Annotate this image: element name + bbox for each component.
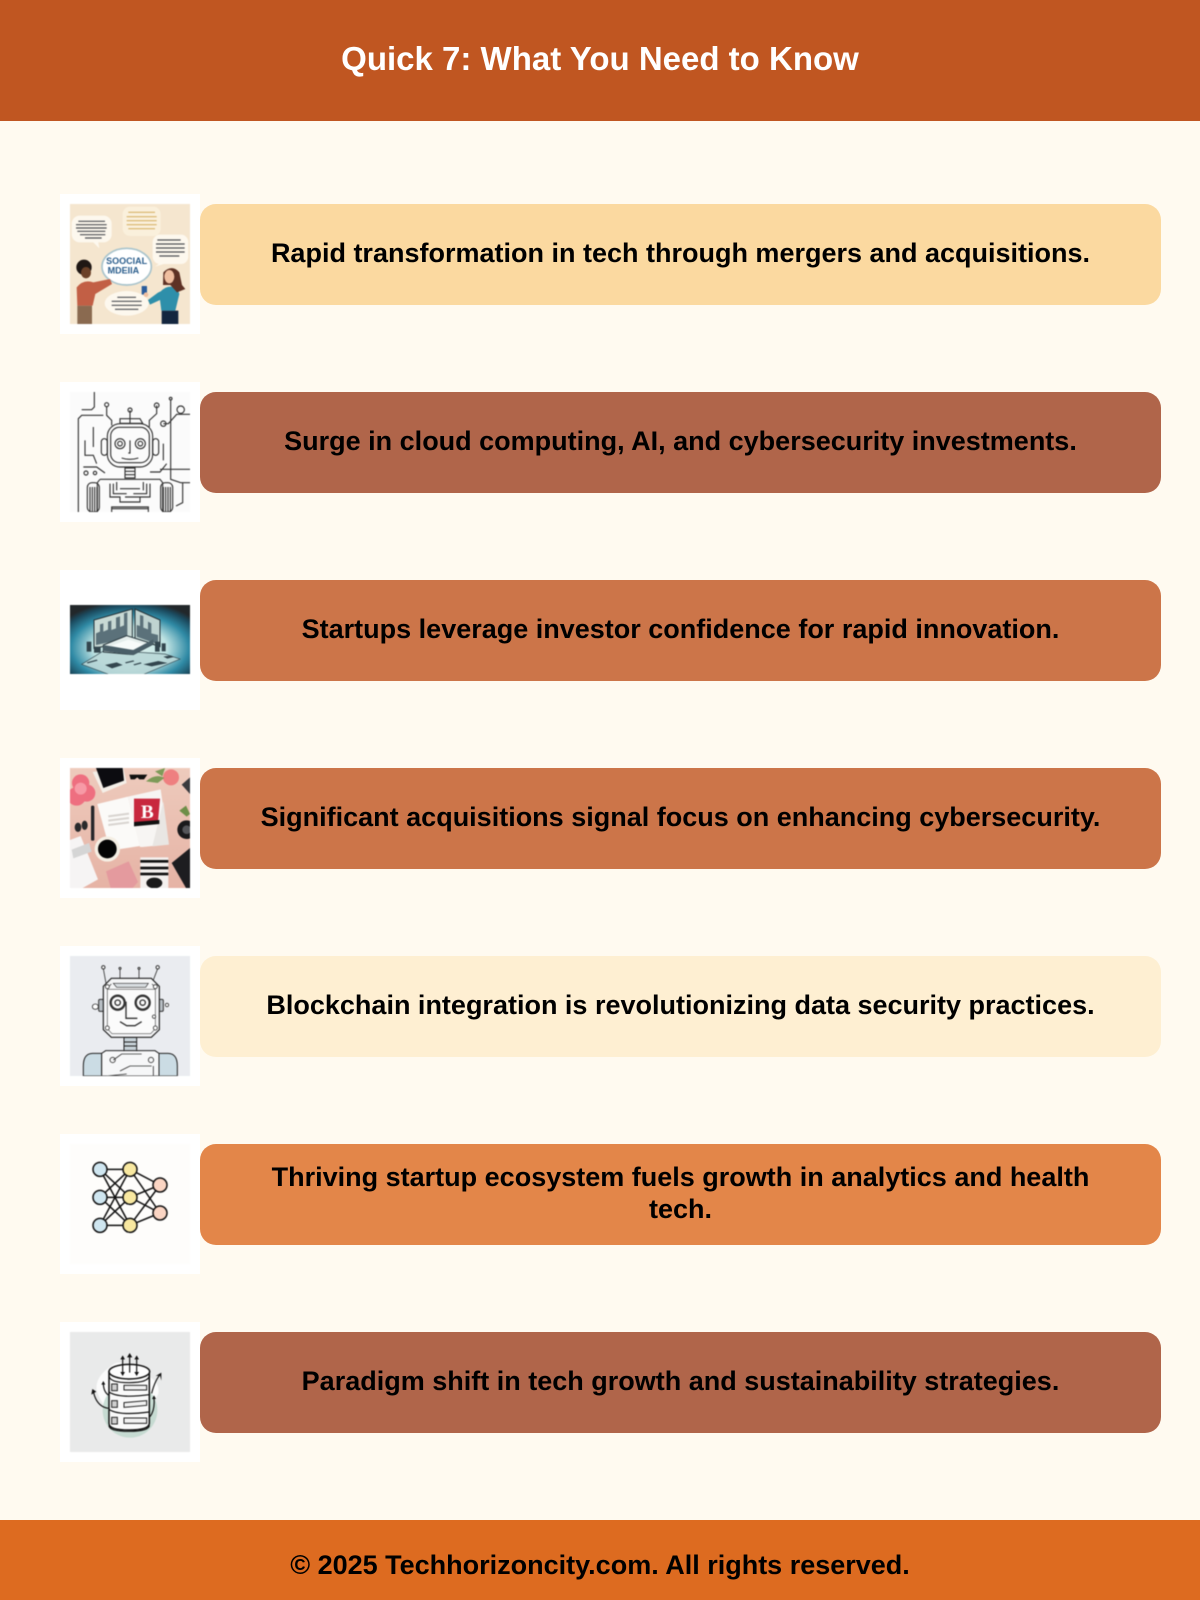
header band with title: [0, 0, 1200, 121]
bar: point 3: [200, 580, 1161, 681]
icon: social media illustration: SOOCIAL: [106, 256, 148, 266]
bar: point 4: Significant acquisitions signal focus on enhancing cybersecurity.: [261, 802, 1100, 832]
icon: isometric tech city scene: [60, 570, 200, 710]
bar: point 6: [200, 1144, 1161, 1245]
footer band with copyright: © 2025 Techhorizoncity.com. All rights reserved.: [290, 1550, 910, 1580]
row 6: startup ecosystem: [60, 1134, 1161, 1274]
row 7: paradigm shift: [60, 1322, 1161, 1462]
bar: point 5: Blockchain integration is revolutionizing data security practices.: [266, 990, 1095, 1020]
bar: point 4: [200, 768, 1161, 869]
bar: point 2: Surge in cloud computing, AI, and cybersecurity investments.: [284, 426, 1077, 456]
icon: friendly square robot: [60, 946, 200, 1086]
footer band with copyright: [0, 1520, 1200, 1600]
bar: point 6: Thriving startup ecosystem fuels growth in analytics and health tech.: [272, 1162, 1089, 1224]
bar: point 1: [200, 204, 1161, 305]
bar: point 7: Paradigm shift in tech growth and sustainability strategies.: [302, 1366, 1059, 1396]
bar: point 7: [200, 1332, 1161, 1433]
icon: social media illustration: MDEIIA: [108, 265, 140, 275]
row 1: rapid transformation: [60, 194, 1161, 334]
row 5: blockchain: [60, 946, 1161, 1086]
icon: database cylinder with arrows: [60, 1322, 200, 1462]
icon: line-art robot with circuits: [60, 382, 200, 522]
bar: point 1: Rapid transformation in tech through mergers and acquisitions.: [271, 238, 1090, 268]
bar: point 2: [200, 392, 1161, 493]
row 3: startups: [60, 570, 1161, 710]
icon: desk flat lay with magazine: B: [141, 802, 154, 823]
icon: social media illustration: [60, 194, 200, 334]
row 4: acquisitions: [60, 758, 1161, 898]
icon: neural network diagram: [60, 1134, 200, 1274]
title: Quick 7: What You Need to Know: [341, 40, 859, 77]
row 2: cloud computing: [60, 382, 1161, 522]
bar: point 5: [200, 956, 1161, 1057]
bar: point 3: Startups leverage investor confidence for rapid innovation.: [302, 614, 1059, 644]
icon: desk flat lay with magazine: [60, 758, 200, 898]
